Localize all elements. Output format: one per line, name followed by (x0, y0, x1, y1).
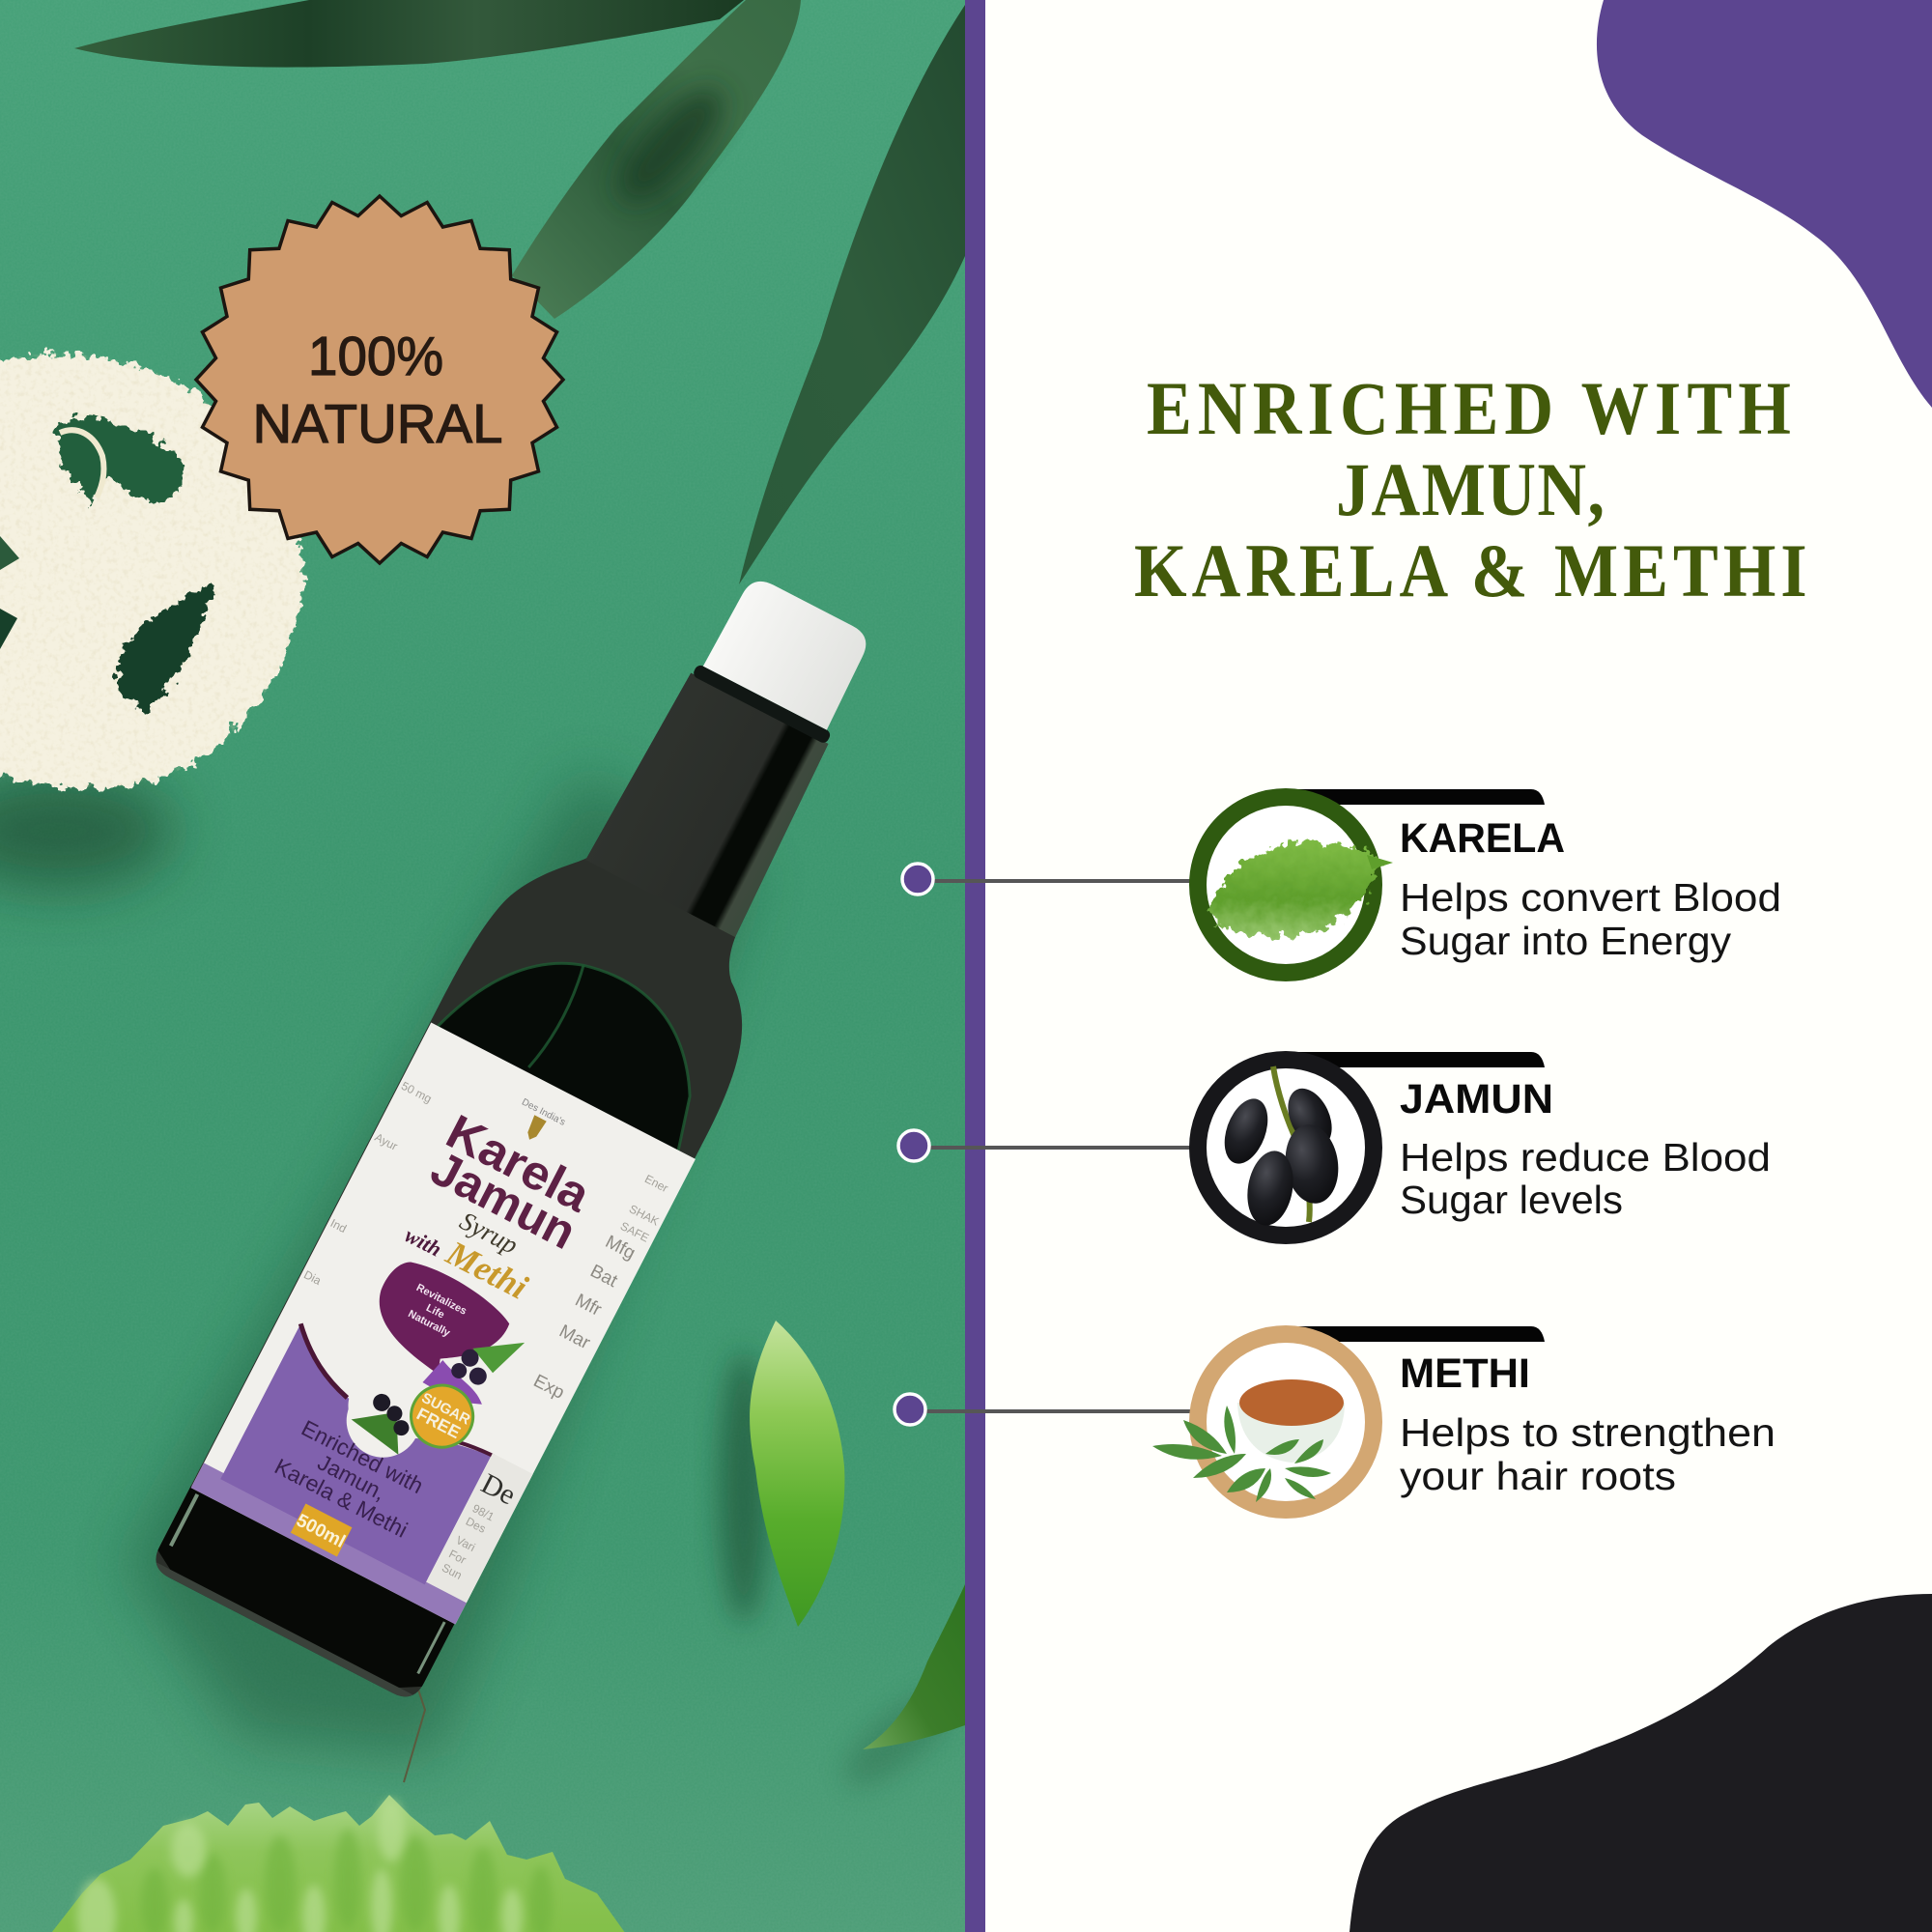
label sugar free badge (400, 1375, 484, 1458)
connector and dot: karela (902, 864, 1198, 895)
description: karela: Sugar into Energy (1400, 919, 1732, 963)
icon: methi bowl and leaves (1152, 1379, 1345, 1502)
bottle cap (694, 582, 866, 743)
title: karela: KARELA (1400, 815, 1565, 862)
panel: green photo background (0, 0, 966, 1932)
label side info: Des (464, 1515, 488, 1536)
badge: 100% natural: NATURAL (253, 393, 502, 455)
description: methi: your hair roots (1400, 1454, 1676, 1498)
label enriched text (270, 1412, 433, 1543)
label sugar free badge: SUGAR (419, 1390, 473, 1429)
item: jamun (898, 1052, 1771, 1236)
description: jamun: Helps reduce Blood (1400, 1135, 1771, 1179)
item: karela (902, 789, 1781, 973)
heading: JAMUN, (1336, 449, 1605, 532)
label side info: 98/1 (470, 1501, 497, 1524)
label liver illustration: Revitalizes (414, 1282, 469, 1318)
heading: ENRICHED WITH (1147, 368, 1791, 451)
label brand logo: Des India's (520, 1097, 567, 1128)
bitter gourd: bottom (48, 1681, 628, 1932)
label title (406, 1115, 585, 1299)
label enriched text: Jamun, (314, 1449, 390, 1505)
title: jamun: JAMUN (1400, 1076, 1553, 1122)
loofah slice (0, 354, 303, 787)
leaf: top horizontal (74, 0, 744, 68)
leaf: long right (739, 5, 965, 584)
leaf: bottom right (863, 1584, 965, 1749)
label liver illustration (351, 1251, 536, 1417)
label title: Methi (440, 1233, 534, 1307)
purple divider bar (965, 0, 985, 1932)
description: jamun (1400, 1135, 1771, 1222)
label side info: Ind (328, 1216, 349, 1236)
leaf: bright centre right (750, 1321, 844, 1627)
product bottle (156, 582, 866, 1696)
label title: with (401, 1223, 445, 1262)
label liver illustration: Naturally (406, 1308, 453, 1340)
icon: bitter gourd (1208, 841, 1393, 937)
black top bar: jamun (1294, 1052, 1545, 1067)
decorative blob: black bottom right (1350, 1594, 1932, 1932)
label side info: For (446, 1547, 469, 1567)
label enriched text: Karela & Methi (270, 1454, 412, 1543)
badge: 100% natural (196, 196, 563, 563)
black top bar: methi (1294, 1326, 1545, 1342)
badge: 100% natural: 100% (308, 326, 443, 387)
description: jamun: Sugar levels (1400, 1178, 1623, 1222)
label side info: Mar (555, 1321, 594, 1354)
icon: jamun berries (1216, 1066, 1343, 1229)
label side info: Exp (530, 1371, 567, 1404)
label liver illustration: Life (424, 1302, 446, 1321)
heading: KARELA & METHI (1134, 530, 1807, 613)
description: methi: Helps to strengthen (1400, 1410, 1776, 1455)
label side info: Mfr (572, 1291, 605, 1321)
label side info: SAFE (618, 1219, 651, 1245)
description: karela (1400, 875, 1781, 963)
connector and dot: jamun (898, 1130, 1198, 1161)
panel: right white background (985, 0, 1932, 1932)
label side info: SHAK (627, 1202, 661, 1229)
label title: Syrup (455, 1206, 523, 1260)
ring: karela (1198, 797, 1374, 973)
decorative blob: purple top right (1597, 0, 1932, 408)
label berries and leaf (334, 1372, 433, 1470)
ring: jamun (1198, 1060, 1374, 1236)
item: methi (895, 1326, 1776, 1510)
label side info: Bat (586, 1261, 621, 1292)
label side info: Ayur (373, 1130, 400, 1153)
label title: Jamun (422, 1141, 584, 1260)
description: karela: Helps convert Blood (1400, 875, 1781, 920)
description: methi (1400, 1410, 1776, 1498)
label brand logo (522, 1098, 565, 1140)
label side info: 50 mg (399, 1079, 434, 1106)
label side info: Sun (440, 1561, 464, 1582)
connector and dot: methi (895, 1394, 1198, 1425)
heading (1134, 368, 1807, 613)
leaf: top centre (512, 0, 801, 319)
bottle label (191, 1023, 696, 1624)
label side info: Dia (301, 1267, 324, 1288)
label 500ml tag: 500ml (293, 1511, 349, 1552)
label title: Karela (439, 1104, 600, 1223)
label side info (205, 1053, 680, 1603)
label side info: De (476, 1467, 521, 1511)
label enriched text: Enriched with (298, 1415, 428, 1498)
label side info: Vari (454, 1533, 477, 1554)
ring: methi (1198, 1334, 1374, 1510)
black top bar: karela (1294, 789, 1545, 805)
label side info: Mfg (602, 1232, 639, 1264)
label side info: Ener (642, 1172, 670, 1195)
title: methi: METHI (1400, 1350, 1530, 1397)
label sugar free badge: FREE (413, 1404, 464, 1442)
